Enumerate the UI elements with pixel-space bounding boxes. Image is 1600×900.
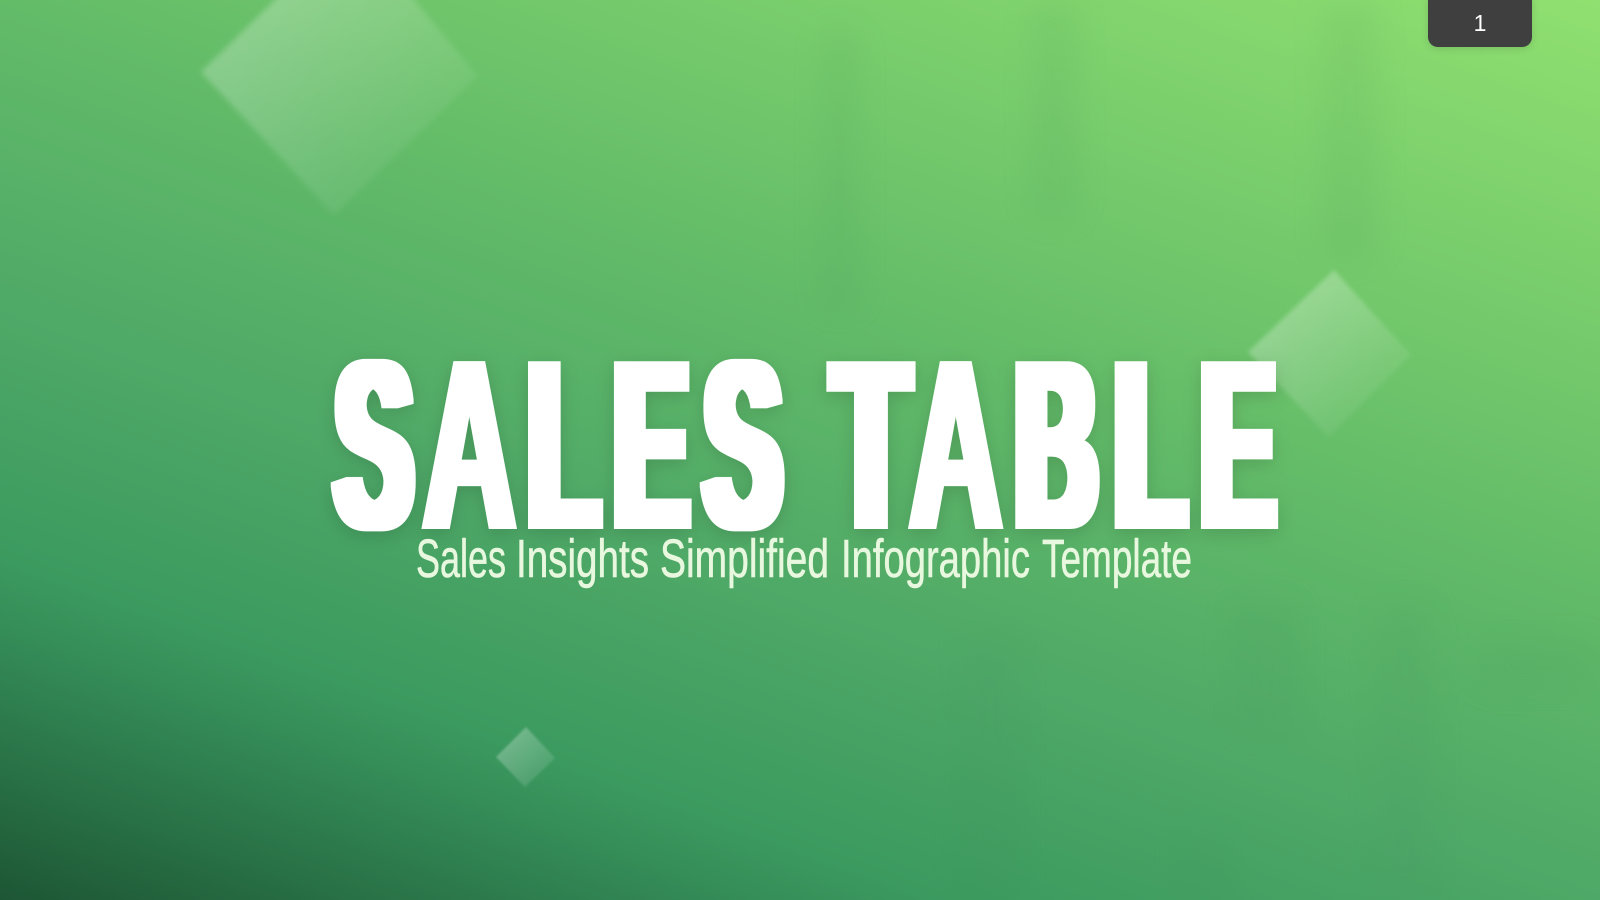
- title: S: [335, 313, 412, 578]
- title: L: [1115, 313, 1185, 578]
- subtitle: [416, 529, 1192, 589]
- title: S: [704, 313, 781, 578]
- diamond: top left: [201, 0, 478, 215]
- subtitle: Sales: [416, 529, 506, 589]
- title: A: [910, 308, 1002, 581]
- page number badge: [1428, 0, 1532, 47]
- subtitle: Infographic: [841, 529, 1030, 589]
- subtitle: Template: [1042, 529, 1192, 589]
- diamond: right: [1248, 270, 1411, 437]
- subtitle: Simplified: [660, 529, 829, 589]
- title: L: [528, 313, 599, 578]
- subtitle: Insights: [516, 529, 649, 589]
- diamond: bottom: [496, 727, 555, 787]
- title: A: [423, 308, 515, 581]
- page number badge: 1: [1474, 10, 1486, 36]
- title and subtitle: E: [1202, 313, 1274, 578]
- title: [335, 308, 1274, 581]
- title: B: [1016, 313, 1097, 578]
- title: T: [833, 313, 909, 578]
- title: E: [615, 313, 688, 578]
